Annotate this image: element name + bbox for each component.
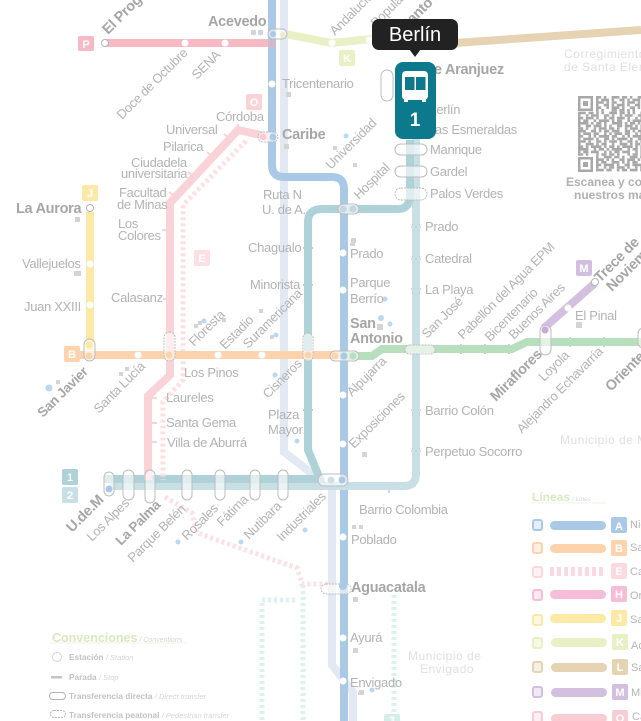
bold station labels rotated: San Javier: [35, 363, 92, 420]
station labels horizontal: Juan XXIII: [24, 299, 81, 314]
lines legend: K: [616, 637, 624, 649]
bold station labels horizontal: [16, 14, 504, 596]
lines legend: L: [617, 662, 624, 674]
station labels horizontal: Ciudadela: [131, 155, 188, 170]
municipality labels: Municipio de: [408, 649, 481, 663]
bold station labels rotated: Miraflores: [488, 346, 546, 405]
line J yellow: [86, 212, 94, 350]
QR finder squares: [578, 96, 593, 172]
dotted teal future line: [262, 585, 303, 721]
line O pink: [148, 130, 270, 480]
station labels horizontal: Manrique: [430, 142, 482, 157]
station labels rotated: Los Alpes: [84, 495, 133, 544]
bold station labels horizontal: Aguacatala: [351, 580, 427, 596]
station labels rotated: Alejandro Echavarría: [514, 343, 606, 436]
station labels horizontal: Facultad: [119, 185, 167, 200]
station labels rotated: Fátima: [214, 491, 252, 529]
station labels rotated: Bicentenario: [482, 285, 541, 344]
station labels horizontal: Prado: [350, 246, 383, 261]
stop ticks: [149, 124, 604, 493]
conventions legend: [50, 631, 230, 720]
station labels horizontal: Catedral: [425, 251, 472, 266]
bold station labels horizontal: Acevedo: [208, 14, 267, 30]
small service icons: [56, 30, 582, 695]
station labels rotated: SENA: [189, 47, 224, 82]
station labels rotated: Loyola: [536, 347, 573, 384]
station labels rotated: Parque Belén: [125, 501, 188, 565]
line badges: E: [198, 253, 206, 265]
QR code: [578, 96, 641, 172]
station labels horizontal: Plaza: [268, 407, 300, 422]
station labels horizontal: [22, 76, 617, 690]
station labels horizontal: Perpetuo Socorro: [425, 444, 522, 459]
station labels horizontal: Los Pinos: [184, 365, 239, 380]
icon: bus: [402, 71, 428, 102]
station labels horizontal: universitaria: [121, 166, 188, 181]
transfer capsules: [84, 29, 641, 594]
conventions legend: Convenciones / Conventions: [52, 631, 183, 645]
station labels horizontal: Palos Verdes: [430, 186, 504, 201]
line badges: B: [68, 349, 76, 361]
line 2 teal: [104, 140, 410, 479]
station labels horizontal: Santa Gema: [166, 415, 237, 430]
station labels rotated: Industriales: [274, 488, 329, 544]
station labels rotated: Buenos Aires: [506, 279, 568, 342]
station labels horizontal: Minorista: [250, 277, 301, 292]
lines legend: J: [616, 613, 622, 625]
dotted teal Envigado line: [392, 595, 396, 715]
station labels rotated: Rosales: [179, 500, 221, 543]
line badges: O: [250, 97, 259, 109]
station labels horizontal: Chagualo: [248, 240, 301, 255]
lines legend: A: [615, 521, 623, 533]
station labels horizontal: La Playa: [425, 282, 474, 297]
bold station labels horizontal: Caribe: [282, 127, 326, 143]
map pin: bus line 1: 1: [410, 110, 421, 131]
station labels horizontal: Colores: [118, 228, 161, 243]
station labels horizontal: Las Esmeraldas: [428, 122, 518, 137]
transfer station dots: [86, 31, 548, 590]
conventions legend: Estación / Station: [69, 652, 133, 662]
station labels horizontal: Vallejuelos: [22, 256, 81, 271]
lines legend: Líneas / Lines: [532, 490, 592, 504]
bold station labels rotated: U.de.M: [64, 492, 107, 536]
lines legend: E: [615, 566, 623, 578]
lines legend: H: [615, 589, 623, 601]
station labels horizontal: Gardel: [430, 164, 468, 179]
station labels rotated: Cisneros: [260, 355, 305, 401]
station labels horizontal: Calasanz: [111, 290, 163, 305]
station labels horizontal: Envigado: [350, 675, 402, 690]
station labels horizontal: Barrio Colón: [425, 403, 494, 418]
line badges: [62, 36, 592, 721]
station labels rotated: [84, 0, 606, 565]
station labels horizontal: Parque: [350, 275, 390, 290]
line badges: 1: [67, 472, 73, 484]
station labels horizontal: Ayurá: [350, 630, 383, 645]
bold station labels rotated: La Palma: [113, 497, 164, 548]
tooltip: Berlín: [372, 19, 458, 57]
conventions legend: Transferencia directa / Direct transfer: [69, 691, 207, 701]
bold station labels horizontal: La Aurora: [16, 201, 82, 217]
station labels rotated: Doce de Octubre: [114, 45, 190, 122]
lines legend: B: [615, 543, 623, 555]
line M purple: [544, 283, 595, 328]
station labels horizontal: Mayor: [268, 422, 304, 437]
line Z green: [345, 342, 641, 356]
line badges: J: [87, 188, 93, 200]
blue bike icons: [46, 134, 392, 692]
station labels rotated: Santa Lucía: [91, 358, 149, 416]
municipality labels: Envigado: [420, 662, 474, 676]
line H lavender: [284, 0, 353, 721]
bold station labels horizontal: Antonio: [350, 331, 403, 347]
bold station labels horizontal: e Aranjuez: [434, 62, 504, 78]
station labels horizontal: Berrío: [350, 291, 384, 306]
station labels horizontal: Tricentenario: [282, 76, 354, 91]
station labels rotated: Suramericana: [240, 285, 306, 351]
bold station labels rotated: [35, 0, 641, 548]
station labels horizontal: de Minas: [117, 197, 168, 212]
line badges: P: [82, 39, 90, 51]
station labels horizontal: Berlín: [428, 102, 460, 117]
line 2 horizontal overlay: [104, 477, 322, 483]
line E dotted pink: [163, 141, 335, 584]
tooltip: Berlín: Berlín: [389, 24, 441, 46]
line badges: K: [343, 53, 351, 65]
station labels horizontal: Córdoba: [216, 109, 265, 124]
line L tan: [455, 30, 641, 43]
line B orange: [72, 351, 340, 359]
line badges: M: [579, 263, 589, 275]
station labels rotated: Pabellón del Agua EPM: [455, 239, 557, 342]
station labels horizontal: Prado: [425, 219, 458, 234]
municipality labels: [408, 47, 641, 676]
station labels horizontal: Ruta N: [263, 187, 302, 202]
line 1 light teal: [110, 135, 416, 486]
station labels rotated: Hospital: [351, 160, 393, 202]
station labels horizontal: U. de A.: [262, 202, 306, 217]
station labels rotated: Universidad: [323, 115, 379, 172]
station labels rotated: Estadio: [217, 312, 256, 352]
line P pink: [105, 39, 272, 47]
lines legend: [531, 490, 641, 721]
station dots: [86, 36, 572, 684]
conventions legend: Parada / Stop: [69, 672, 119, 682]
station labels horizontal: El Pinal: [575, 308, 617, 323]
QR caption: [566, 175, 641, 202]
conventions legend: Transferencia peatonal / Pedestrian transfer: [69, 710, 230, 720]
station labels rotated: Alpujarra: [344, 353, 390, 399]
line A blue: [272, 0, 344, 721]
station labels horizontal: Villa de Aburrá: [167, 435, 248, 450]
station labels rotated: Exposiciones: [346, 388, 408, 451]
station labels horizontal: Poblado: [351, 532, 397, 547]
terminal stations: [86, 40, 598, 286]
map pin: bus line 1: [395, 62, 436, 139]
lines legend: M: [615, 687, 625, 699]
bold station labels horizontal: San: [350, 316, 376, 332]
station labels rotated: San José: [419, 294, 466, 341]
line K light green: [285, 34, 372, 43]
station labels rotated: Floresta: [186, 306, 228, 349]
station labels horizontal: Los: [118, 216, 139, 231]
station labels horizontal: Pilarica: [163, 139, 204, 154]
station labels horizontal: Barrio Colombia: [359, 502, 449, 517]
line badges: 2: [67, 490, 73, 502]
station labels horizontal: Universal: [166, 122, 218, 137]
station labels rotated: Nutibara: [241, 498, 285, 542]
station labels horizontal: Laureles: [166, 390, 214, 405]
